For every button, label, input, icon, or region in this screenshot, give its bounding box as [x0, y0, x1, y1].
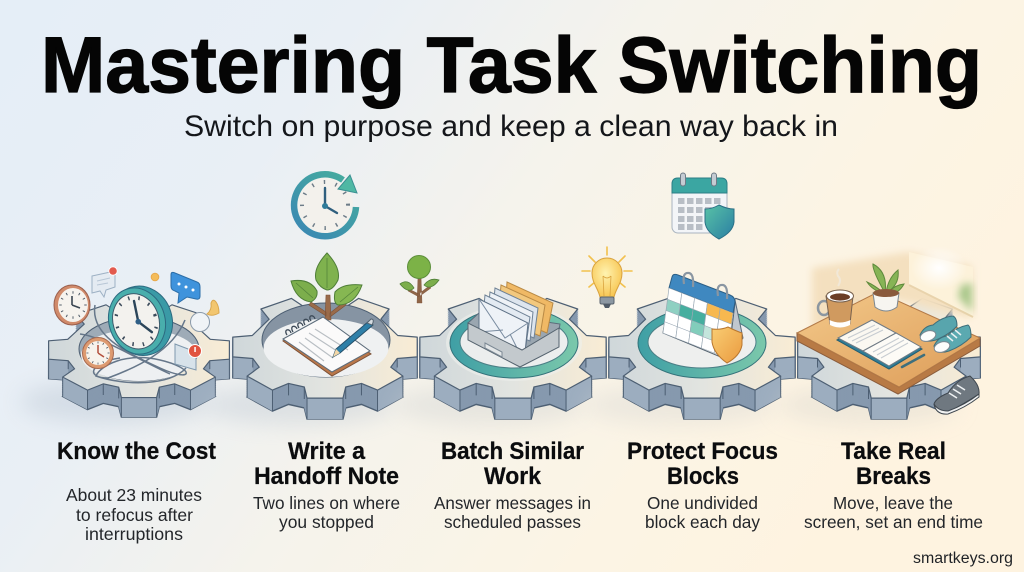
panel: batch similar work	[395, 282, 606, 532]
icon: coffee mug	[818, 269, 854, 328]
description	[804, 493, 983, 532]
teal ring	[446, 305, 582, 381]
watermark: smartkeys.org	[913, 550, 1013, 567]
icon: teal sneakers	[919, 316, 971, 354]
magnifier ball	[190, 312, 210, 332]
dot: gold	[151, 273, 159, 281]
icon: calendar with shield	[663, 273, 743, 363]
description: Answer messages in	[434, 493, 591, 513]
icon: notepad and pen	[283, 316, 373, 376]
clock: small lower	[82, 338, 114, 368]
icon: light message bubble	[92, 267, 117, 297]
heading: Batch Similar	[441, 438, 584, 465]
description: Move, leave the	[833, 493, 953, 513]
heading: Write a	[288, 438, 366, 465]
teal ring	[638, 308, 766, 378]
heading	[841, 438, 946, 490]
panel: protect focus blocks	[585, 173, 795, 532]
description: One undivided	[647, 493, 758, 513]
heading: Know the Cost	[57, 438, 216, 465]
panel: write a handoff note	[205, 174, 417, 532]
heading: Handoff Note	[254, 463, 399, 490]
title: Mastering Task Switching	[41, 20, 982, 109]
icon: inbox tray with mail	[468, 282, 560, 367]
heading	[254, 438, 399, 490]
icon: light bulb	[582, 247, 632, 308]
heading: Protect Focus	[627, 438, 778, 465]
panel: take real breaks	[778, 246, 983, 532]
clock: small top-left	[54, 285, 90, 325]
description	[66, 485, 202, 544]
icon: calendar with shield	[672, 173, 734, 239]
description: you stopped	[279, 512, 374, 532]
panel: know the cost	[20, 267, 229, 544]
icon: alert card	[175, 344, 202, 370]
icon: sprout	[291, 253, 362, 320]
icon: potted plant	[867, 264, 904, 311]
description: to refocus after	[76, 505, 193, 525]
icon: clock with arrow	[294, 174, 357, 236]
description: block each day	[645, 512, 760, 532]
heading: Take Real	[841, 438, 946, 465]
heading	[441, 438, 584, 490]
gear	[233, 298, 417, 419]
heading: Work	[484, 463, 542, 490]
gear	[798, 298, 980, 419]
shadow	[20, 380, 210, 424]
description	[253, 493, 400, 532]
clock: large	[100, 278, 181, 364]
gear	[420, 298, 606, 419]
description: About 23 minutes	[66, 485, 202, 505]
shadow	[395, 385, 585, 425]
shadow	[585, 385, 775, 425]
gear	[49, 305, 229, 417]
desk	[797, 292, 980, 394]
heading	[627, 438, 778, 490]
icon: small tree	[400, 256, 439, 303]
heading: Breaks	[856, 463, 931, 490]
icon: pencil	[902, 355, 924, 367]
description: scheduled passes	[444, 512, 581, 532]
tangled wires	[80, 305, 186, 383]
icon: blue chat bubble	[171, 272, 200, 303]
description	[645, 493, 760, 532]
heading: Blocks	[667, 463, 739, 490]
description: interruptions	[85, 524, 183, 544]
shadow	[778, 385, 958, 425]
icon: grey sneaker	[934, 376, 979, 414]
description: screen, set an end time	[804, 512, 983, 532]
icon: bell	[207, 300, 219, 315]
description	[434, 493, 591, 532]
subtitle: Switch on purpose and keep a clean way back in	[184, 110, 838, 143]
wall and window	[812, 246, 973, 330]
shadow	[205, 385, 395, 425]
gear hole	[262, 303, 390, 377]
gear hole	[79, 317, 199, 381]
description: Two lines on where	[253, 493, 400, 513]
icon: open book	[837, 320, 922, 369]
gear	[609, 298, 795, 419]
